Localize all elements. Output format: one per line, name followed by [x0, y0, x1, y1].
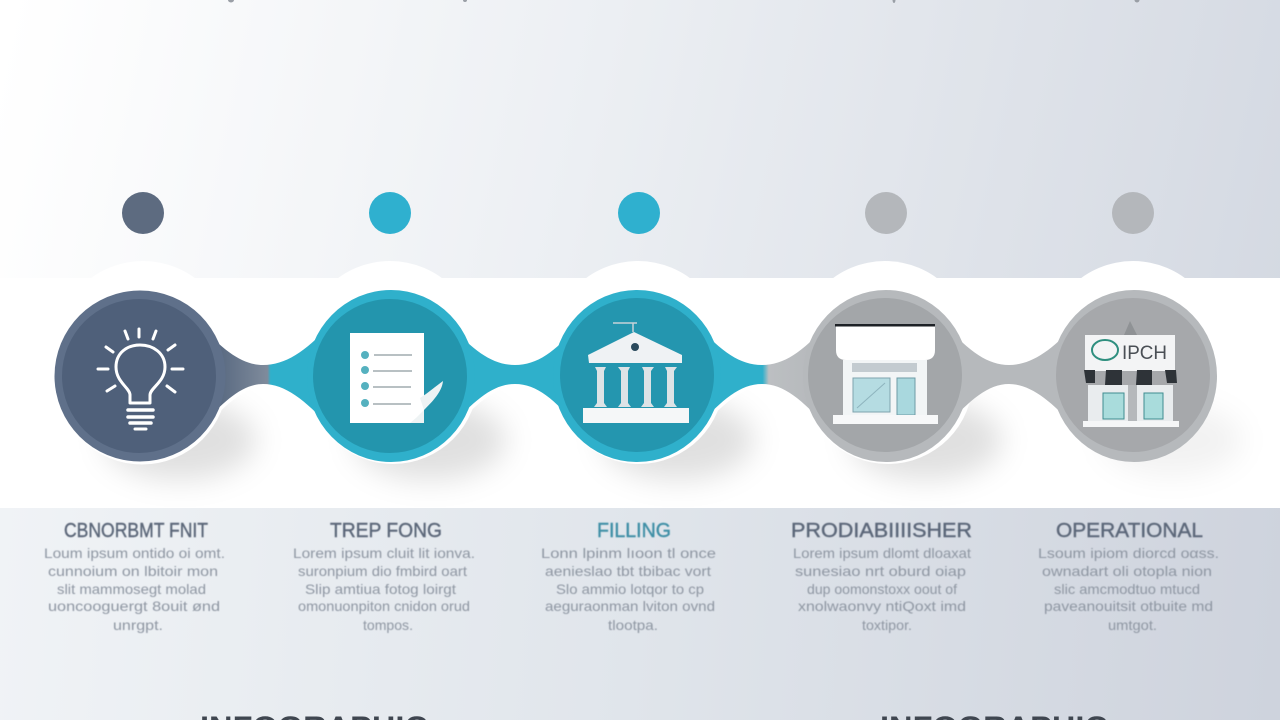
body: column 5 — [1038, 545, 1219, 633]
timeline dots — [122, 192, 1154, 234]
lower background band — [0, 508, 1280, 720]
body: column 4 — [793, 545, 971, 633]
connector: step 4 to 5 — [945, 325, 1075, 427]
icon: checklist document — [350, 333, 443, 423]
body: column 4: toxtipor. — [862, 617, 912, 633]
body: column 5: umtgot. — [1108, 617, 1157, 633]
icon: shop with sign: IPCH — [1122, 343, 1167, 364]
column 5 text — [1038, 520, 1219, 633]
body: column 3: Slo ammio lotqor to cp — [556, 581, 704, 597]
connector: step 1 to 2 — [200, 325, 330, 427]
body: column 3: Lonn lpinm lıoon tl once — [541, 545, 716, 561]
body: column 3: tlootpa. — [608, 617, 658, 633]
body: column 5: Lsoum ipiom diorcd oαss. — [1038, 545, 1219, 561]
white central band with bumps — [0, 261, 1280, 508]
drop shadows — [104, 400, 1242, 480]
body: column 1: unrgpt. — [113, 617, 163, 633]
body: column 3 — [541, 545, 716, 633]
body: column 2: omonuonpiton cnidon orud — [298, 598, 470, 614]
body: column 5: ownadart oli otopla nion — [1042, 563, 1212, 579]
body: column 2 — [293, 545, 475, 633]
step 2 circle with document icon — [307, 290, 475, 462]
icon: bank building — [583, 323, 689, 423]
body: column 2: suronpium dio fmbird oart — [298, 563, 467, 579]
clipped text fragments at top edge — [228, 0, 1140, 3]
column 1 text — [44, 520, 225, 633]
column 2 text — [293, 520, 475, 633]
step 3 circle with bank icon — [553, 290, 721, 462]
heading: column 4: PRODIABIIIISHER — [791, 520, 972, 542]
step 4 circle with storefront icon — [803, 290, 969, 462]
body: column 1 — [44, 545, 225, 633]
body: column 4: xnolwaonvy ntiQoxt imd — [798, 598, 966, 614]
body: column 5: paveanouitsit otbuite md — [1044, 598, 1213, 614]
connector: step 3 to 4 — [697, 325, 827, 427]
body: column 3: aenieslao tbt tbibac vort — [545, 563, 711, 579]
column 3 text — [541, 520, 716, 633]
icon: storefront — [833, 324, 938, 424]
body: column 4: dup oomonstoxx oout of — [807, 581, 957, 597]
body: column 1: slit mammosegt molad — [57, 581, 206, 597]
body: column 2: Slip amtiua fotog loirgt — [305, 581, 456, 597]
column 4 text — [791, 520, 972, 633]
body: column 5: slic amcmodtuo mtucd — [1054, 581, 1200, 597]
icon: shop with sign — [1083, 321, 1179, 427]
body: column 2: tompos. — [363, 617, 413, 633]
body: column 1: Loum ipsum ontido oi omt. — [44, 545, 225, 561]
connector: step 2 to 3 — [450, 325, 578, 427]
step 5 circle with shop icon — [1051, 290, 1217, 462]
body: column 4: Lorem ipsum dlomt dloaxat — [793, 545, 971, 561]
icon: lightbulb — [98, 329, 183, 429]
body: column 2: Lorem ipsum cluit lit ionva. — [293, 545, 475, 561]
body: column 4: sunesiao nrt oburd oiap — [795, 563, 966, 579]
body: column 3: aeguraonman lviton ovnd — [545, 598, 715, 614]
step 1 circle with lightbulb icon — [54, 290, 226, 462]
body: column 1: uoncooguergt 8ouit ønd — [48, 598, 220, 614]
heading: column 2: TREP FONG — [330, 520, 442, 542]
heading: column 3: FILLING — [597, 520, 671, 542]
body: column 1: cunnoium on lbitoir mon — [48, 563, 218, 579]
white rims — [56, 294, 973, 464]
heading: column 5: OPERATIONAL — [1056, 520, 1203, 542]
heading: column 1: CBNORBMT FNIT — [64, 520, 208, 542]
